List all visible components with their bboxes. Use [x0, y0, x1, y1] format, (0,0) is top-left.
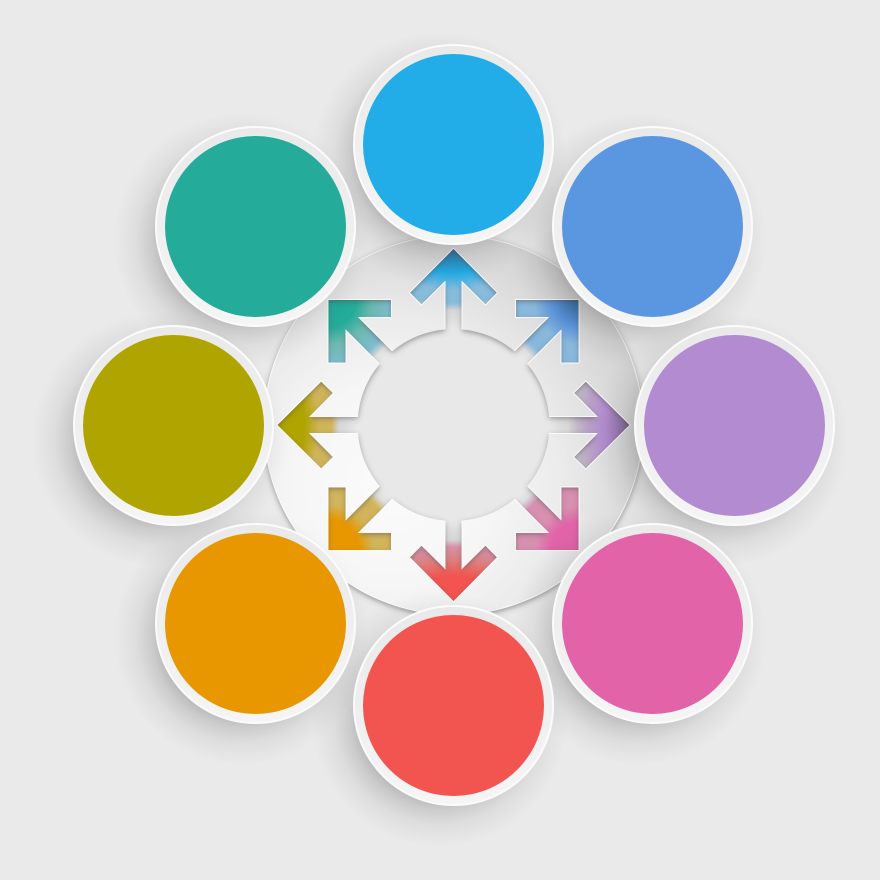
- arrow down-right: pink: [514, 486, 579, 550]
- circle: teal: [155, 126, 356, 327]
- circle: periwinkle: [552, 126, 753, 327]
- central wheel: [264, 235, 644, 615]
- arrow down-left: orange: [328, 486, 392, 550]
- white disc with arrow cut-outs: [264, 235, 644, 615]
- circle: olive: [73, 325, 274, 526]
- circle: pink: [552, 523, 753, 724]
- arrow down: red: [410, 521, 498, 602]
- arrow left: olive: [277, 381, 358, 469]
- arrow up-left: teal: [328, 300, 392, 364]
- arrow up-right: periwinkle: [514, 300, 579, 364]
- circle: purple: [634, 325, 835, 526]
- arrow up: blue: [410, 248, 498, 329]
- recessed plane with central hub: [276, 247, 632, 603]
- circle: orange: [155, 523, 356, 724]
- arrow right: purple: [549, 381, 630, 469]
- circle: blue: [353, 44, 554, 245]
- disc rim highlight: [264, 236, 643, 614]
- circle: red: [353, 605, 554, 806]
- arrow edge highlights: [277, 248, 630, 602]
